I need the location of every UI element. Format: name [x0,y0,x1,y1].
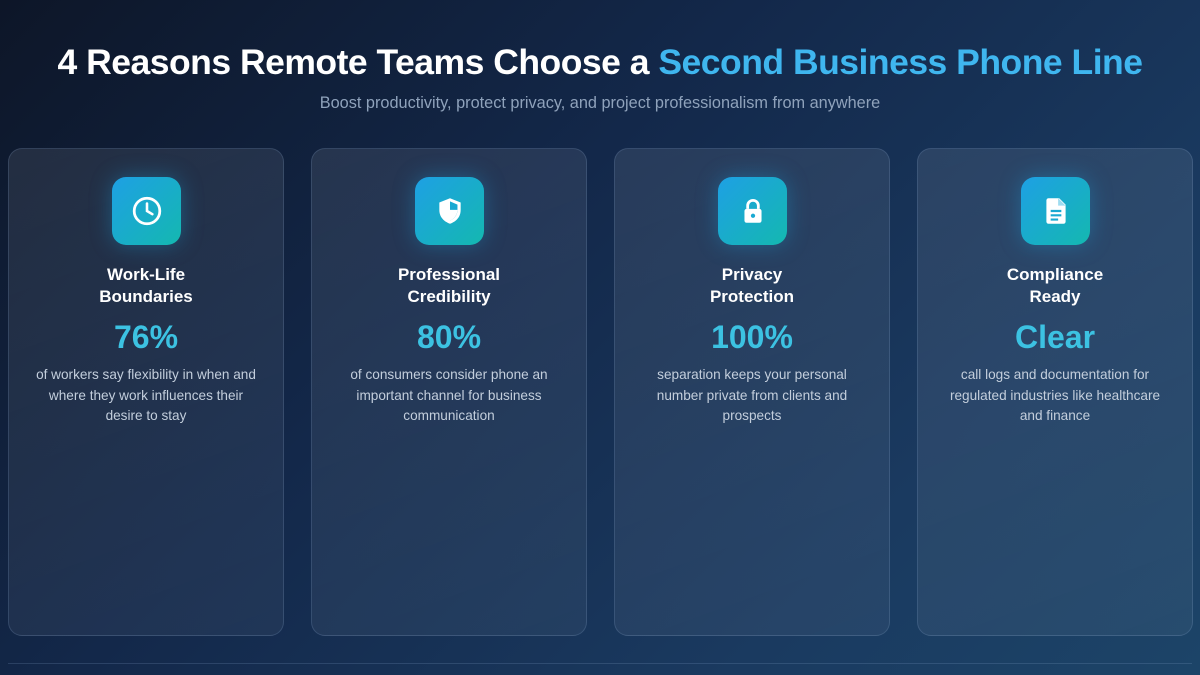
stat: Clear [1015,319,1095,355]
heading: Compliance [1007,265,1103,284]
text: of consumers consider phone an important channel for business communication [350,367,548,423]
icon: clock [112,177,181,245]
heading: Boundaries [99,287,193,306]
panel: work-life [8,148,284,636]
text: of workers say flexibility in when and where they work influences their desire to stay [36,367,256,423]
heading [710,265,794,306]
heading [398,265,500,306]
heading: Work-Life [107,265,185,284]
heading: Privacy [722,265,782,284]
panel: credibility [311,148,587,636]
heading [99,265,193,306]
heading: Credibility [407,287,491,306]
panel: privacy [614,148,890,636]
subtitle: Boost productivity, protect privacy, and project professionalism from anywhere [320,94,880,112]
heading [1007,265,1103,306]
icon: document [1021,177,1090,245]
icon: shield [415,177,484,245]
stat: 100% [711,319,793,355]
text: separation keeps your personal number private from clients and prospects [657,367,847,423]
heading: Protection [710,287,794,306]
stat: 80% [417,319,481,355]
icon: lock [718,177,787,245]
stat: 76% [114,319,178,355]
heading: Ready [1029,287,1081,306]
heading: Professional [398,265,500,284]
panel: compliance [917,148,1193,636]
title: 4 Reasons Remote Teams Choose a Second Business Phone Line [58,42,1142,82]
text: call logs and documentation for regulated industries like healthcare and finance [950,367,1160,423]
